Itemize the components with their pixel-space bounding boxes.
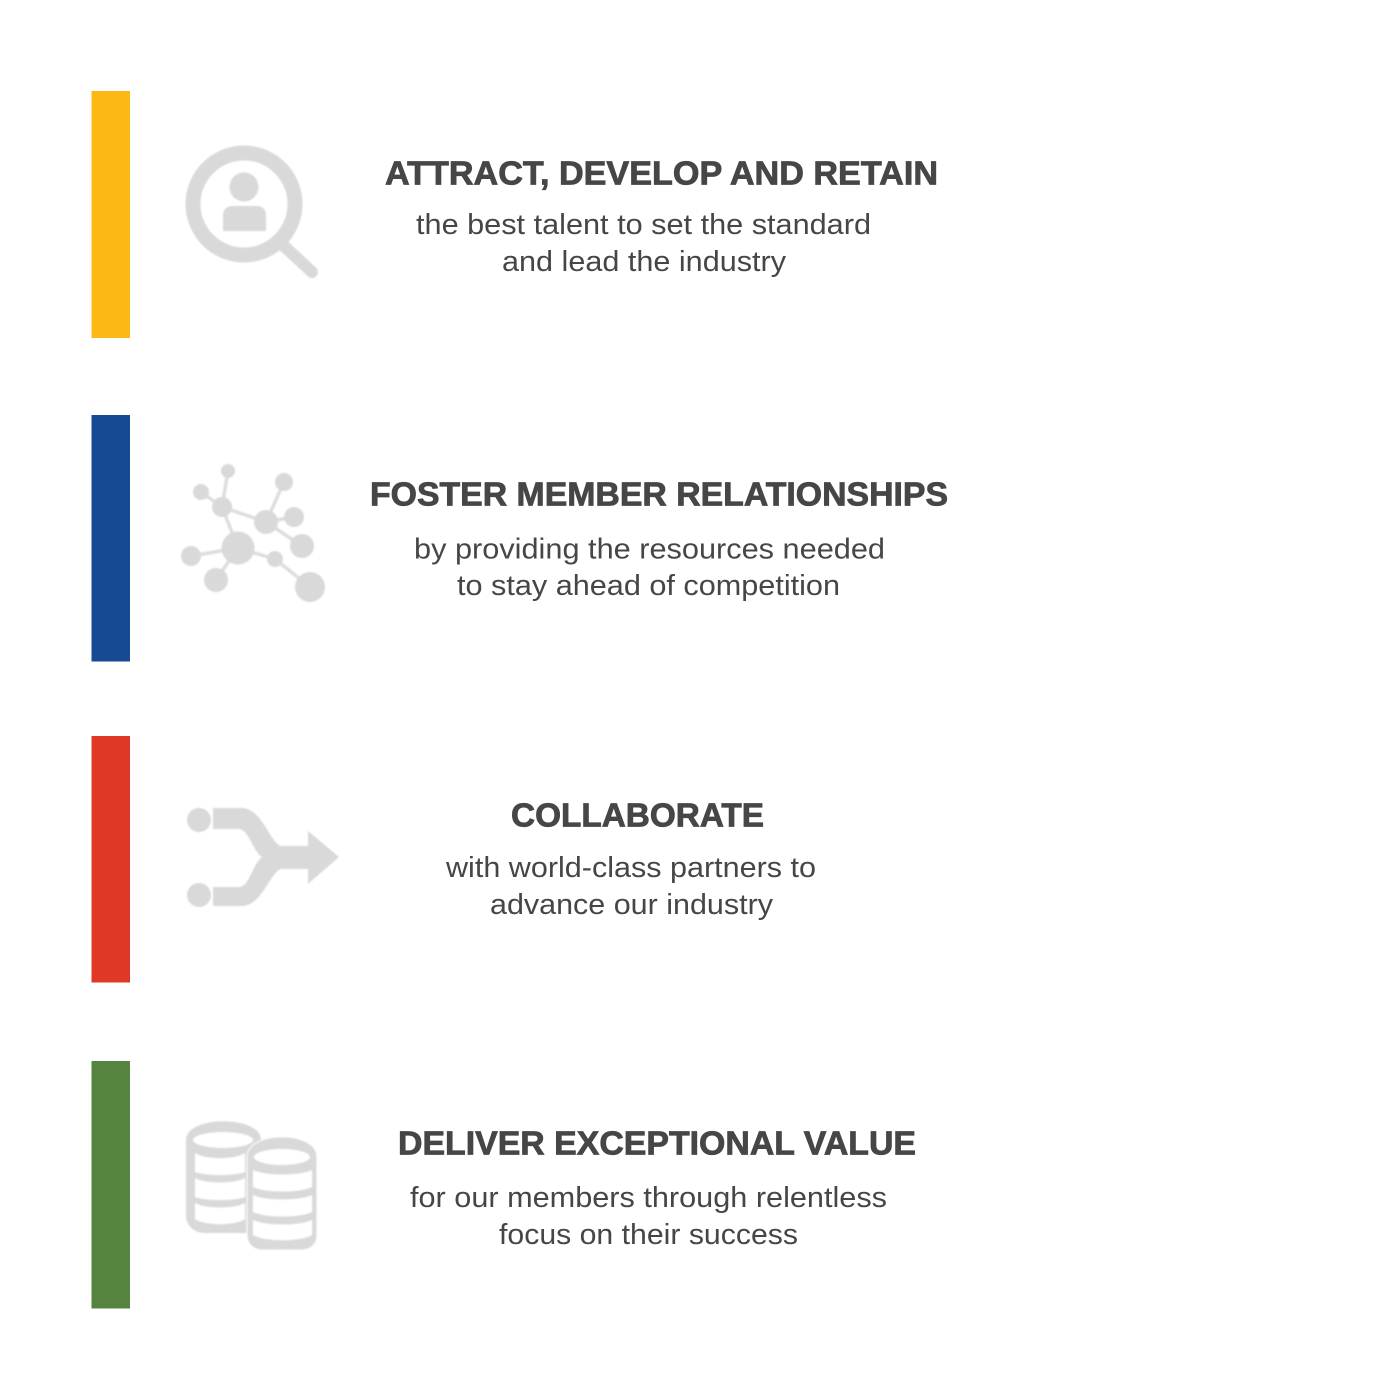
yellow bar bbox=[92, 91, 130, 338]
text block: advance our industry bbox=[490, 889, 774, 921]
icon: magnifier with person bbox=[193, 153, 312, 272]
text block: the best talent to set the standard bbox=[416, 209, 871, 241]
text block bbox=[416, 209, 871, 278]
panel: attract bbox=[92, 91, 938, 338]
text block bbox=[445, 852, 816, 921]
text block: by providing the resources needed bbox=[414, 534, 885, 566]
text block: focus on their success bbox=[499, 1219, 798, 1251]
icon: network bbox=[181, 464, 325, 602]
heading: COLLABORATE bbox=[511, 798, 764, 834]
green bar bbox=[92, 1061, 130, 1308]
text block: with world-class partners to bbox=[445, 852, 816, 884]
text block bbox=[410, 1182, 887, 1251]
red bar bbox=[92, 736, 130, 982]
text block: to stay ahead of competition bbox=[457, 570, 840, 602]
icon: coin stacks bbox=[186, 1121, 317, 1250]
panel: foster bbox=[92, 415, 948, 662]
heading: ATTRACT, DEVELOP AND RETAIN bbox=[385, 156, 938, 192]
heading: FOSTER MEMBER RELATIONSHIPS bbox=[370, 476, 948, 514]
text block: for our members through relentless bbox=[410, 1182, 887, 1214]
panel: collaborate bbox=[92, 736, 816, 982]
heading: DELIVER EXCEPTIONAL VALUE bbox=[398, 1126, 916, 1162]
panel: deliver bbox=[92, 1061, 916, 1308]
text block bbox=[414, 534, 885, 602]
icon: merging arrow bbox=[187, 808, 339, 907]
blue bar bbox=[92, 415, 130, 662]
text block: and lead the industry bbox=[502, 246, 787, 278]
